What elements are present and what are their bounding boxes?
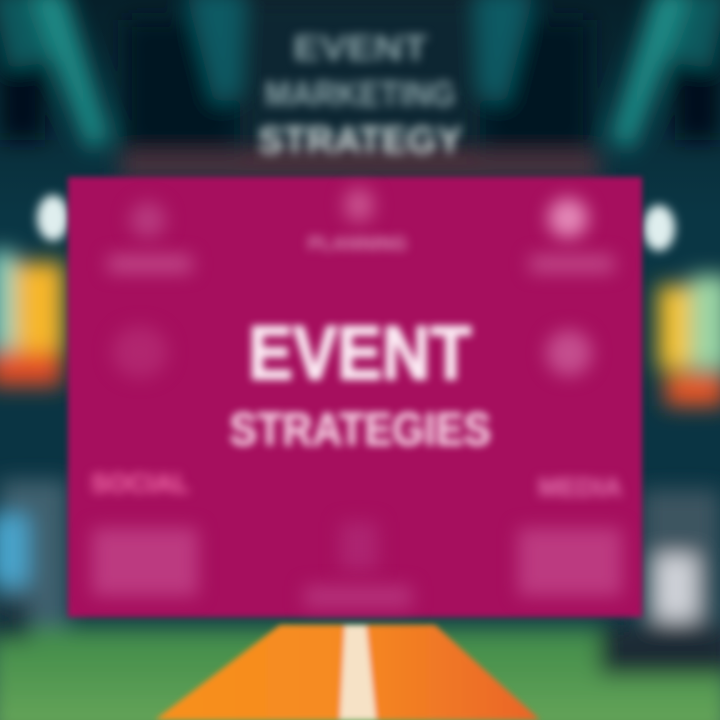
crowd and field (0, 480, 720, 720)
icon: top center (344, 188, 374, 222)
icon: top right (548, 198, 588, 238)
lower right heading: MEDIA (538, 472, 622, 502)
icon: middle left (112, 326, 168, 378)
panel: main magenta board (68, 177, 642, 617)
side screens (0, 250, 720, 406)
lower left text block (92, 528, 198, 596)
lower center icon (340, 522, 378, 570)
label: top left (108, 256, 192, 272)
top heading: MARKETING (265, 75, 455, 114)
lower center text (304, 586, 412, 608)
central subtitle: STRATEGIES (229, 403, 491, 455)
top heading: STRATEGY (258, 120, 462, 162)
lower left heading: SOCIAL (91, 468, 189, 498)
label: top center: PLANNING (308, 234, 407, 255)
central title: EVENT (249, 311, 471, 396)
icon: top left (130, 202, 166, 238)
top heading (254, 28, 466, 162)
label: top right (530, 256, 614, 272)
lower right text block (518, 528, 622, 596)
top heading: EVENT (293, 29, 427, 68)
icon: middle right (546, 330, 592, 376)
